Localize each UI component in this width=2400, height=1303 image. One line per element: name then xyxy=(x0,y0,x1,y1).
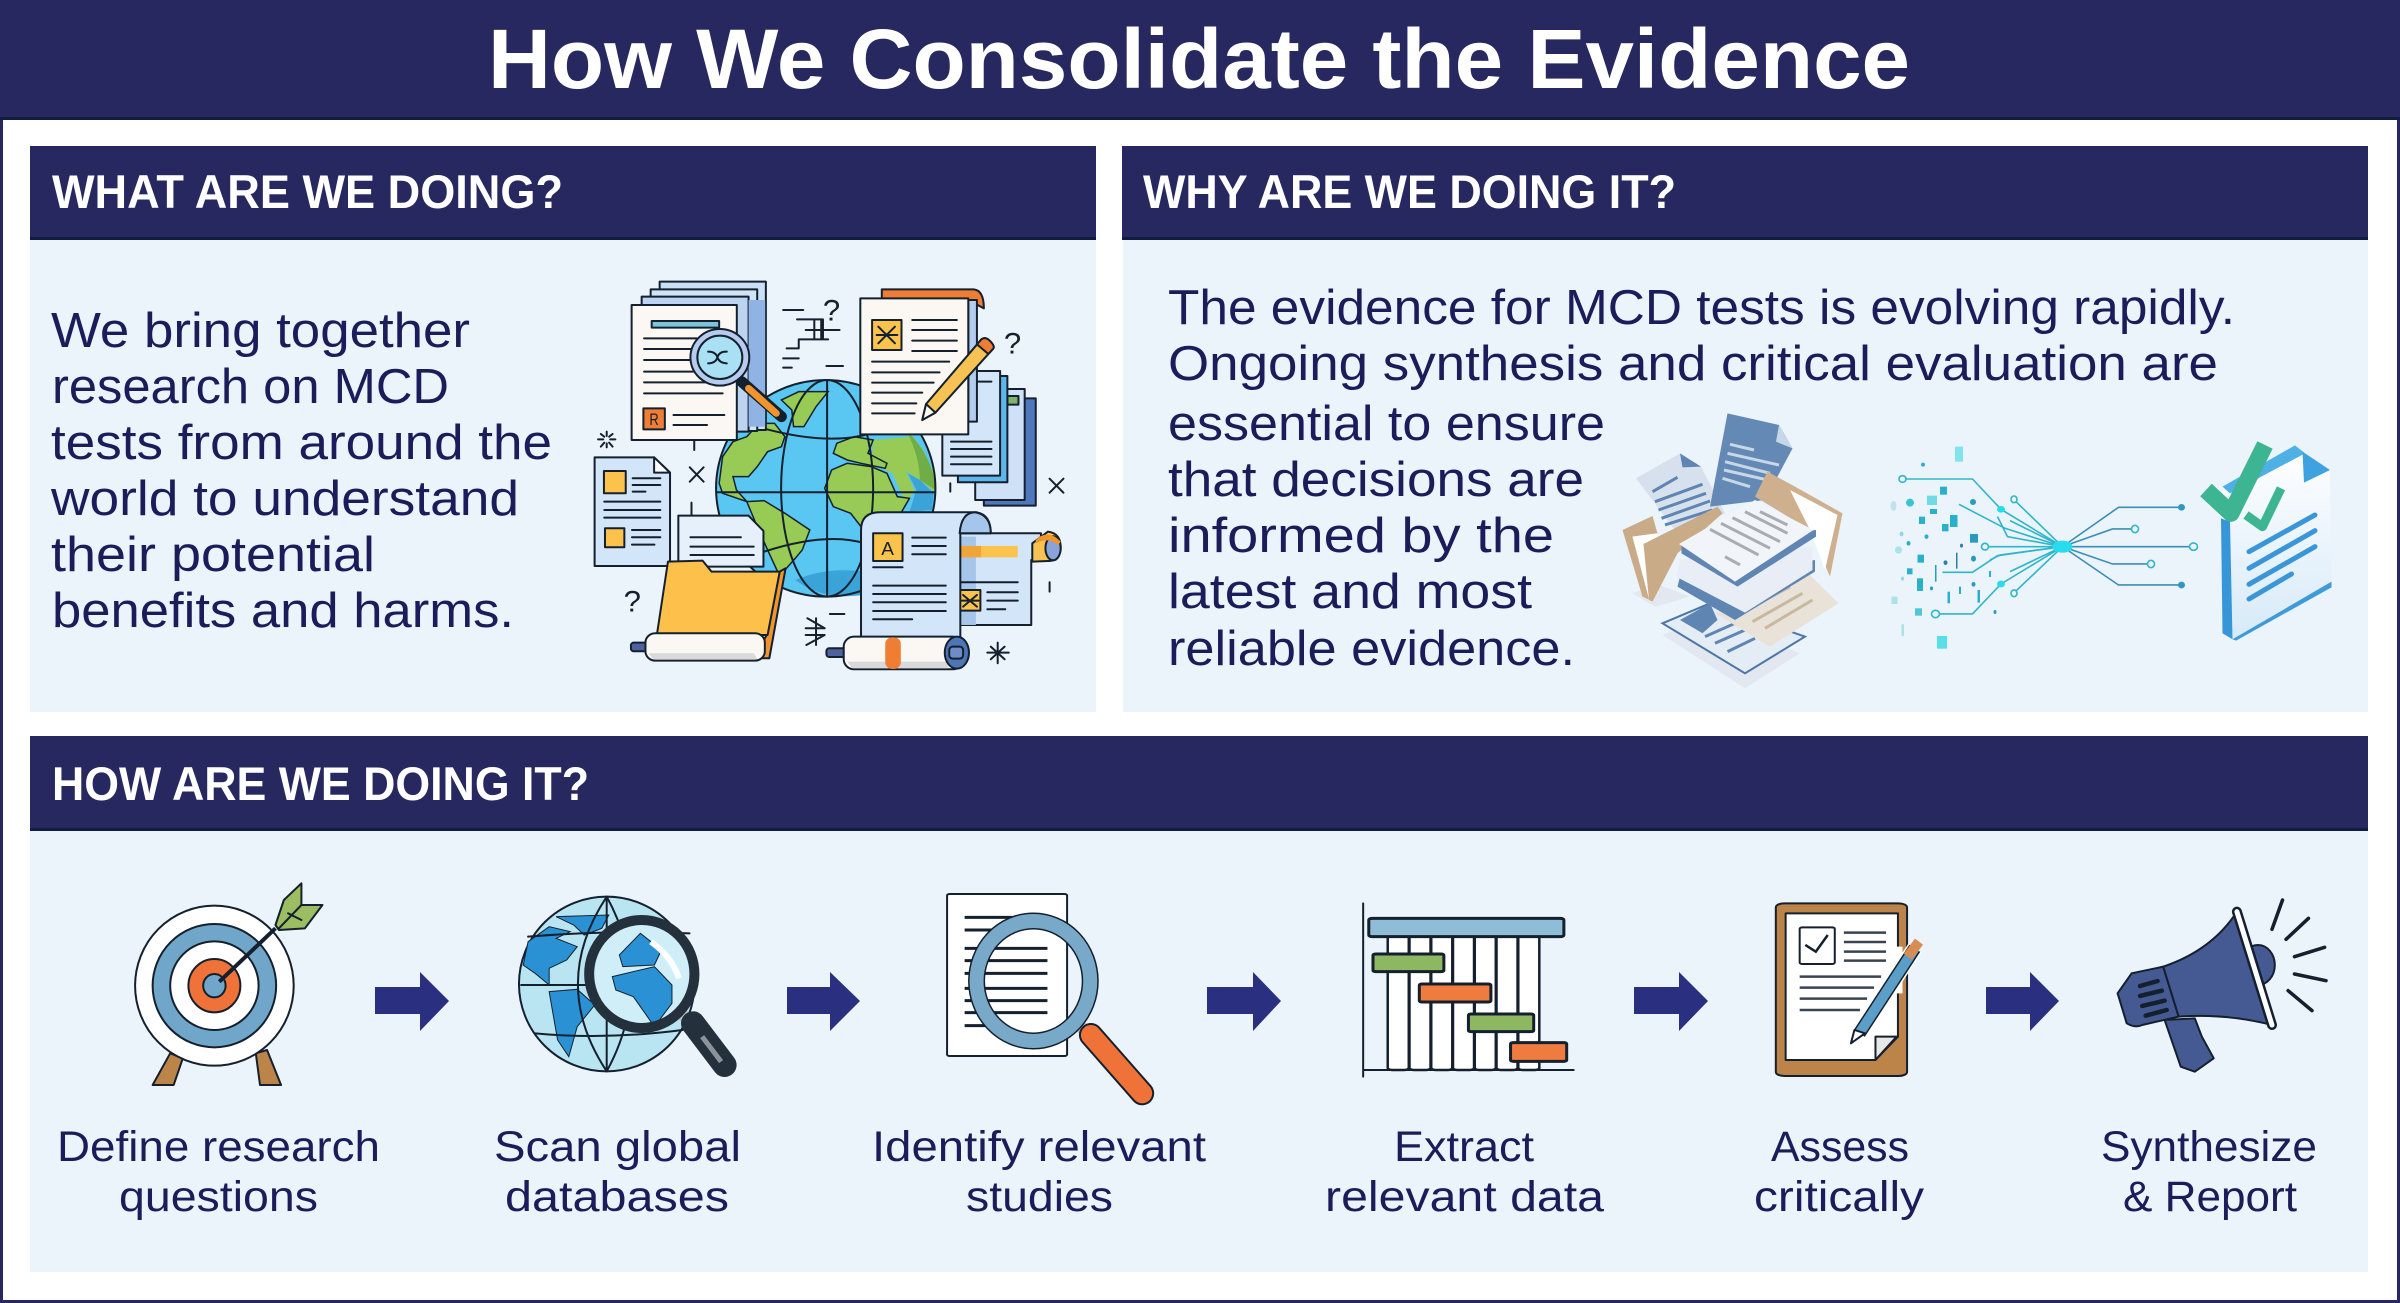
heading: what xyxy=(30,146,1096,240)
label xyxy=(872,1123,1206,1221)
icon: folders and document pile xyxy=(1622,413,1842,688)
text block: what xyxy=(50,304,552,638)
text block: why: The evidence for MCD tests is evolving rapidly. xyxy=(1168,281,2235,335)
heading: what: WHAT ARE WE DOING? xyxy=(52,165,563,218)
icons: scattered symbols: ? xyxy=(823,294,840,328)
text block: why: Ongoing synthesis and critical evaluation are xyxy=(1168,337,2218,391)
text block: what: benefits and harms. xyxy=(52,584,514,638)
label: Extract xyxy=(1394,1123,1534,1171)
icons: scattered symbols: ? xyxy=(1004,327,1021,360)
label: Synthesize xyxy=(2101,1123,2317,1171)
icon: bottom right scroll document: A xyxy=(881,538,895,559)
label xyxy=(494,1123,741,1221)
icon: verified report document xyxy=(2206,445,2332,641)
arrow 5 xyxy=(1986,972,2059,1031)
label: Define research xyxy=(57,1123,380,1171)
label: questions xyxy=(119,1173,318,1221)
label: studies xyxy=(966,1173,1113,1221)
icon: document with magnifier xyxy=(947,894,1142,1093)
label xyxy=(2101,1123,2317,1221)
heading: why: WHY ARE WE DOING IT? xyxy=(1143,165,1676,218)
icons: scattered symbols xyxy=(598,294,1063,663)
icon: left document xyxy=(595,457,670,566)
chart: data streams converging xyxy=(1890,447,2198,649)
label xyxy=(1754,1123,1925,1221)
arrow 2 xyxy=(787,972,860,1031)
text block: what: tests from around the xyxy=(51,416,552,470)
text block: why: reliable evidence. xyxy=(1168,622,1575,676)
label: relevant data xyxy=(1325,1173,1604,1221)
illustration: globe with research documents xyxy=(595,282,1063,669)
label: & Report xyxy=(2123,1173,2297,1221)
label: Identify relevant xyxy=(872,1123,1206,1171)
step 2: scan global databases xyxy=(494,897,741,1221)
text block: why: essential to ensure xyxy=(1168,397,1605,451)
icon: middle document xyxy=(678,516,763,567)
text block: what: We bring together xyxy=(51,304,470,358)
label: Scan global xyxy=(494,1123,741,1171)
illustration: documents to data to verified report xyxy=(1622,413,2332,688)
label xyxy=(57,1123,380,1221)
step 4: extract relevant data xyxy=(1325,903,1604,1221)
title: How We Consolidate the Evidence xyxy=(488,12,1910,106)
text block: why: that decisions are xyxy=(1168,453,1584,507)
icon: clipboard with pen xyxy=(1776,903,1919,1076)
heading: how xyxy=(30,736,2368,831)
label: databases xyxy=(505,1173,729,1221)
label xyxy=(1325,1123,1604,1221)
text block: what: research on MCD xyxy=(52,360,449,414)
icon: target xyxy=(135,883,322,1085)
heading: how: HOW ARE WE DOING IT? xyxy=(52,757,589,810)
icon: document with pencil xyxy=(860,289,994,434)
step 3: identify relevant studies xyxy=(872,894,1206,1221)
icon: document with R and magnifier: R xyxy=(649,410,659,429)
panel: what are we doing xyxy=(30,146,1096,712)
step 1: define research questions xyxy=(57,883,380,1221)
text block: what: their potential xyxy=(51,528,375,582)
icon: gantt data table xyxy=(1363,903,1574,1077)
panel: how are we doing it xyxy=(30,736,2368,1272)
text block: why: informed by the xyxy=(1168,509,1554,563)
text block: why: latest and most xyxy=(1168,565,1532,619)
title banner xyxy=(0,0,2400,120)
icon: folder on scroll xyxy=(631,561,786,661)
text block: what: world to understand xyxy=(50,472,519,526)
panel: why are we doing it xyxy=(1122,146,2368,712)
step 6: synthesize and report xyxy=(2101,900,2326,1221)
icons: scattered symbols: ? xyxy=(624,585,641,618)
icon: globe xyxy=(716,380,935,597)
icon: bottom right scroll document xyxy=(826,512,1061,669)
icon: megaphone xyxy=(2118,900,2326,1072)
text block: why xyxy=(1168,281,2235,676)
arrow 1 xyxy=(375,972,449,1031)
icon: stacked papers xyxy=(942,371,1036,506)
arrow 4 xyxy=(1634,972,1708,1031)
arrow 3 xyxy=(1207,972,1281,1031)
step 5: assess critically xyxy=(1754,903,1925,1221)
label: critically xyxy=(1754,1173,1925,1221)
heading: why xyxy=(1122,146,2368,240)
icon: globe with magnifier xyxy=(519,897,725,1071)
label: Assess xyxy=(1771,1123,1909,1171)
icon: document with R and magnifier xyxy=(632,282,781,440)
